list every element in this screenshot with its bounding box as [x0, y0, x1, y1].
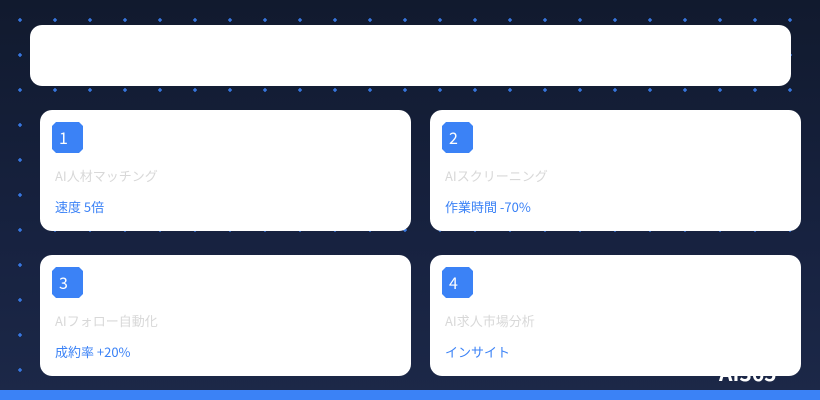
- header panel: [30, 25, 791, 86]
- value 3: 成約率 +20%: [55, 342, 131, 361]
- value 2: 作業時間 -70%: [445, 197, 531, 216]
- badge 4: 4: [449, 270, 458, 294]
- badge 1: [52, 122, 83, 153]
- title 4: AI求人市場分析: [445, 311, 535, 330]
- title 1: AI人材マッチング: [55, 166, 158, 185]
- badge 2: [442, 122, 473, 153]
- badge 2: 2: [449, 125, 458, 149]
- card 1: [40, 110, 411, 231]
- badge 1: 1: [59, 125, 68, 149]
- brand text: AI365: [719, 358, 777, 388]
- card 3: [40, 255, 411, 376]
- title 2: AIスクリーニング: [445, 166, 548, 185]
- value 4: インサイト: [445, 342, 510, 361]
- bottom bar: [0, 390, 820, 400]
- value 1: 速度 5倍: [55, 197, 104, 216]
- card 2: [430, 110, 801, 231]
- badge 3: 3: [59, 270, 68, 294]
- card 4: [430, 255, 801, 376]
- badge 3: [52, 267, 83, 298]
- title 3: AIフォロー自動化: [55, 311, 158, 330]
- badge 4: [442, 267, 473, 298]
